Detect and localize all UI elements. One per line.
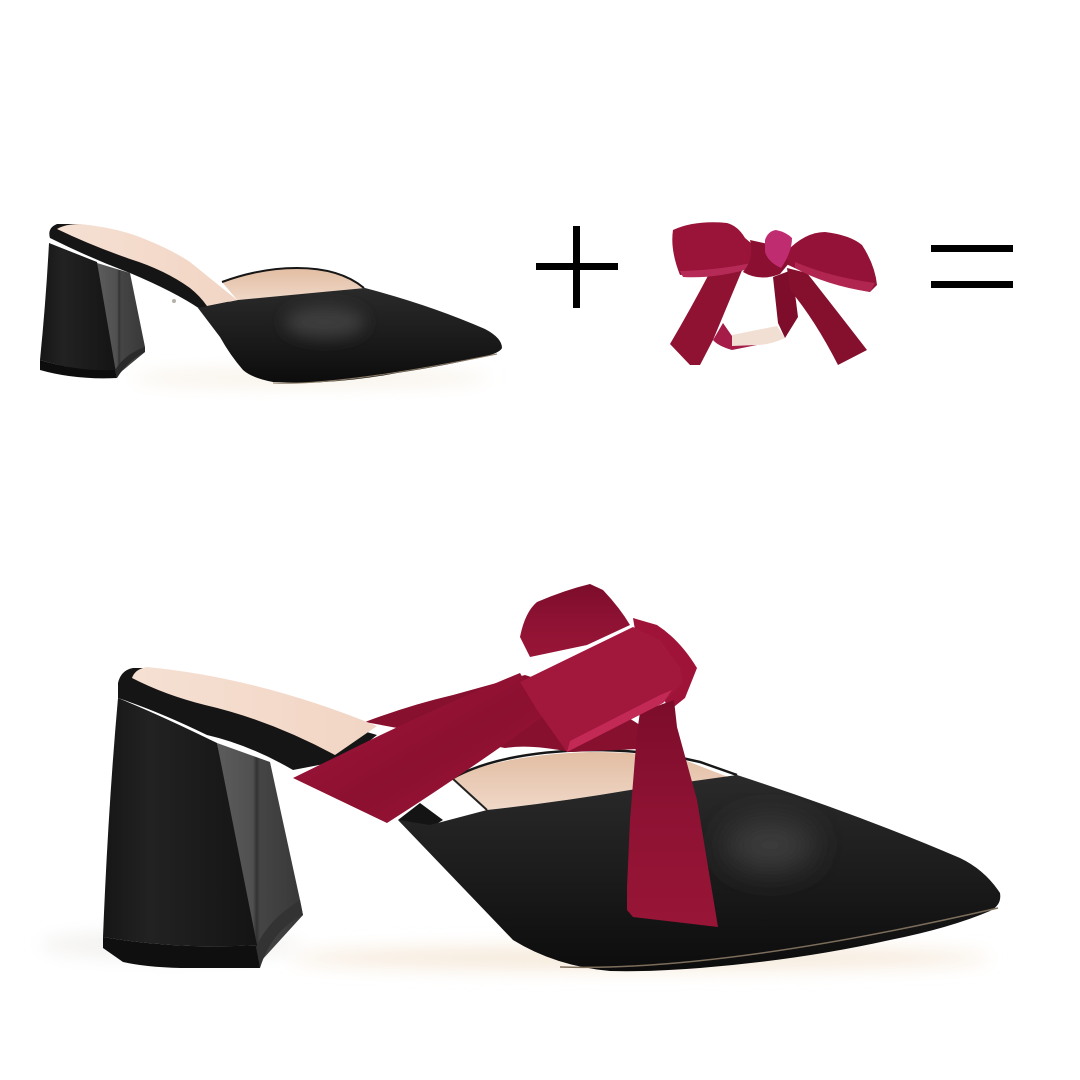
small shoe heel side [97, 263, 145, 376]
small shoe lining [222, 268, 364, 301]
footbed rim [118, 668, 377, 770]
heel top-lift [103, 937, 260, 968]
shank [398, 803, 443, 828]
lining edge line [452, 778, 487, 810]
lining rim [453, 750, 737, 778]
small shoe footbed rim [49, 224, 235, 309]
small shoe insole [57, 224, 237, 306]
bow knot fold [520, 627, 683, 752]
bow right tail [787, 268, 867, 365]
bow left loop [672, 222, 766, 275]
bow tag [732, 326, 785, 346]
equals sign [931, 245, 1013, 288]
bow right loop [633, 618, 697, 710]
insole [132, 667, 377, 755]
small shoe grommet [172, 299, 176, 303]
floor shadow [40, 931, 990, 970]
bow strap [293, 673, 545, 823]
block heel side [217, 743, 303, 960]
behind-strap ribbon [365, 675, 640, 752]
bow left tail [670, 268, 743, 365]
small shoe shadow [130, 372, 490, 384]
large shoe: black mule with velvet bow [40, 584, 1000, 971]
bow band right [773, 270, 798, 338]
knot fold shading [567, 690, 672, 752]
bow centre knot [743, 240, 790, 278]
small shoe heel front [40, 243, 116, 372]
small shoe: black mule [40, 224, 502, 384]
plus sign [536, 226, 618, 308]
velvet bow accessory [670, 222, 877, 365]
toe upper [398, 775, 1000, 971]
heel side lift [256, 900, 303, 968]
block heel front [103, 698, 257, 946]
bow pink knot [765, 230, 792, 268]
bow upper loop [520, 584, 630, 657]
sole edge [560, 908, 998, 967]
small shoe heel sole [40, 360, 117, 378]
lining [453, 752, 728, 810]
bow tail [627, 700, 718, 927]
bow band left [713, 323, 757, 350]
bow right loop [786, 232, 877, 292]
small shoe upper [198, 288, 502, 383]
